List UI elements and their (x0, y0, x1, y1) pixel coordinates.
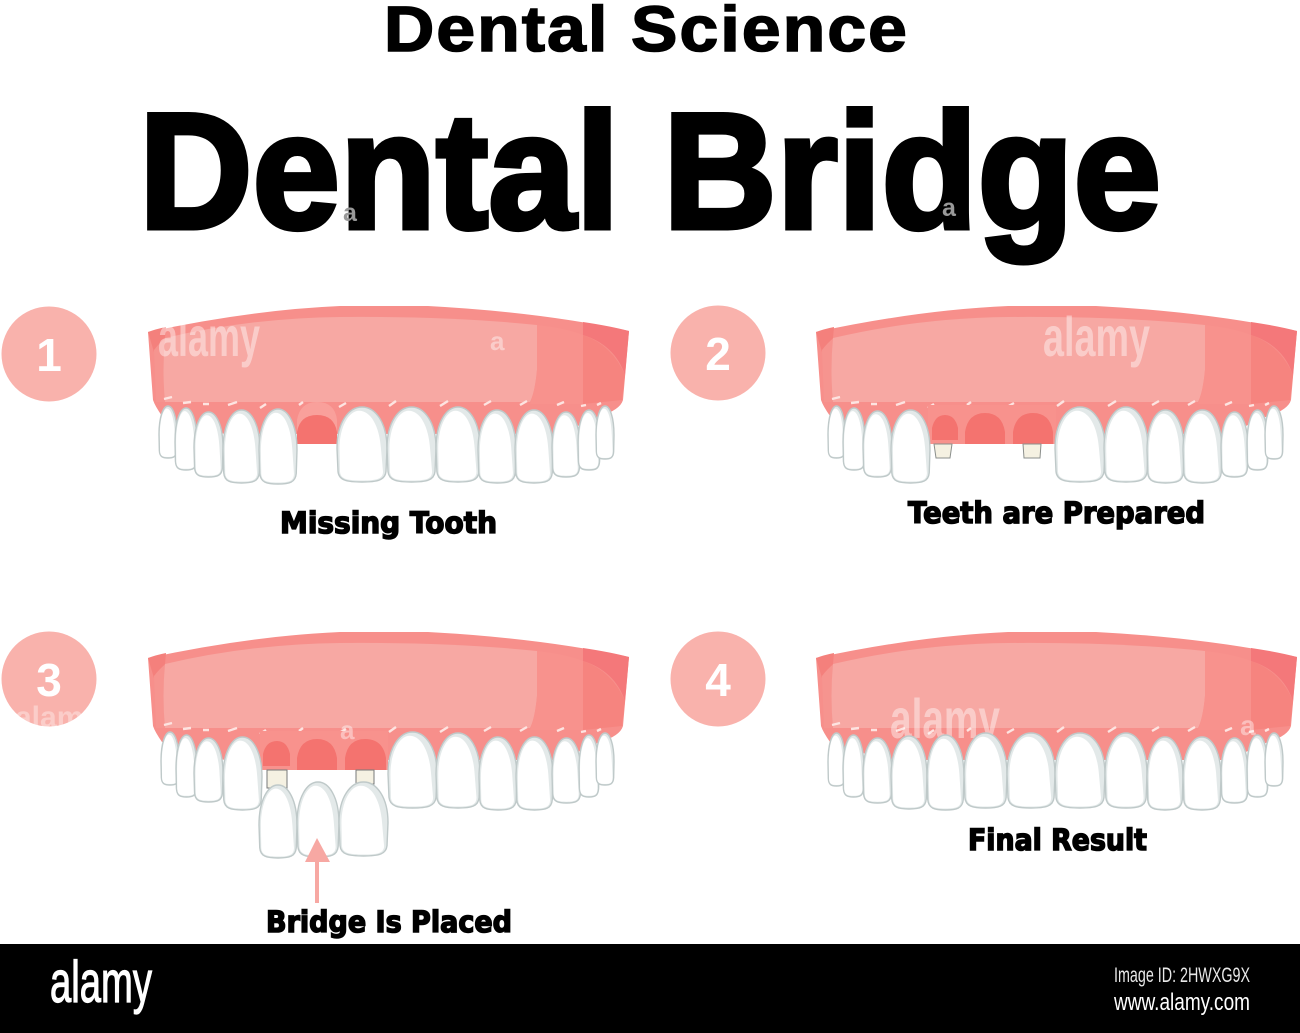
step 2 number badge (670, 306, 766, 400)
step 3 number badge: 3 (36, 654, 62, 706)
step 1 gap socket (297, 402, 337, 444)
step 2 watermark: alamy (1043, 305, 1150, 368)
step 2 number badge: 2 (705, 328, 731, 380)
step 3 abutments (267, 770, 374, 788)
step 4 panel (670, 632, 1297, 857)
step 3 watermark: a (340, 715, 355, 745)
step 3 number badge (2, 632, 96, 726)
step 1 watermark: a (490, 326, 505, 356)
step 3 label: Bridge Is Placed (266, 905, 512, 939)
step 2 panel (670, 305, 1297, 530)
watermark letters in title (343, 194, 957, 227)
step 1 watermark: alamy (158, 305, 260, 368)
step 4 number badge (670, 632, 766, 726)
step 3 bridge (259, 782, 388, 858)
step 1 number badge: 1 (36, 329, 62, 381)
footer bar (0, 944, 1300, 1033)
footer logo: alamy (50, 950, 152, 1015)
step 1 label: Missing Tooth (280, 506, 497, 540)
step 4 number badge: 4 (705, 654, 731, 706)
step 3 watermark: alam (15, 701, 83, 734)
step 1 panel (2, 305, 629, 540)
step 2 gum (816, 306, 1297, 434)
step 4 watermark behind teeth: alamy (890, 687, 1000, 750)
main title: Dental Bridge: Dental Bridge (139, 79, 1161, 263)
watermark letters in title: a (343, 199, 358, 227)
step 4 gum (816, 632, 1297, 760)
step 1 number badge (2, 306, 96, 402)
step 3 arrow (305, 838, 330, 903)
step 2 label: Teeth are Prepared (908, 496, 1205, 530)
website: www.alamy.com (1113, 989, 1250, 1016)
step 4 label: Final Result (968, 823, 1147, 857)
step 2 sockets (928, 405, 1056, 444)
step 3 gum (148, 632, 629, 760)
step 3 teeth (161, 732, 614, 810)
step 1 watermark (158, 305, 505, 368)
step 3 watermark (15, 701, 355, 745)
step 1 teeth (159, 406, 614, 484)
step 3 panel (2, 632, 629, 939)
step 3 sockets (260, 731, 388, 770)
step 4 teeth (828, 733, 1283, 810)
step 4 watermark behind teeth (890, 687, 1256, 750)
step 1 gum (148, 306, 629, 434)
step 4 watermark behind teeth: a (1240, 710, 1256, 741)
step 2 teeth (828, 406, 1283, 483)
step 2 abutments (934, 444, 1041, 458)
watermark letters in title: a (942, 194, 957, 222)
